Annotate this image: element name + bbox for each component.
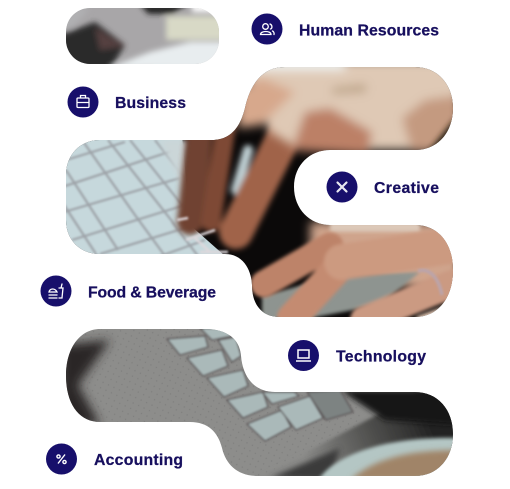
item: Accounting [46,444,183,474]
label: Creative [374,180,439,197]
lower hand [310,222,460,300]
icon: briefcase [68,86,98,118]
icon: food and drink [40,276,72,306]
item: Creative [326,172,439,202]
label: Business [115,95,186,112]
back of upper hand [238,58,460,155]
photo strip: top pill [66,8,219,64]
ring [418,270,442,295]
label: Technology [336,348,426,366]
item: Business [68,86,186,118]
photo: laptop edge and coffee cup [60,325,460,480]
label: Human Resources [299,22,439,40]
keyboard keys [167,328,353,441]
label: Food & Beverage [88,284,216,302]
keyboard [66,140,223,254]
icon: crossed pencil and ruler [326,172,358,202]
icon: percent [46,444,77,474]
icon: people [252,14,282,44]
item: Human Resources [252,14,439,44]
photo: hands typing on keyboard [60,58,460,320]
item: Technology [288,340,426,371]
infographic canvas [40,8,453,476]
item: Food & Beverage [40,276,216,306]
icon: laptop [288,340,319,371]
keys near fingers [177,218,228,252]
coffee cup [318,438,460,480]
upper hand fingers [190,112,296,232]
label: Accounting [94,452,183,469]
